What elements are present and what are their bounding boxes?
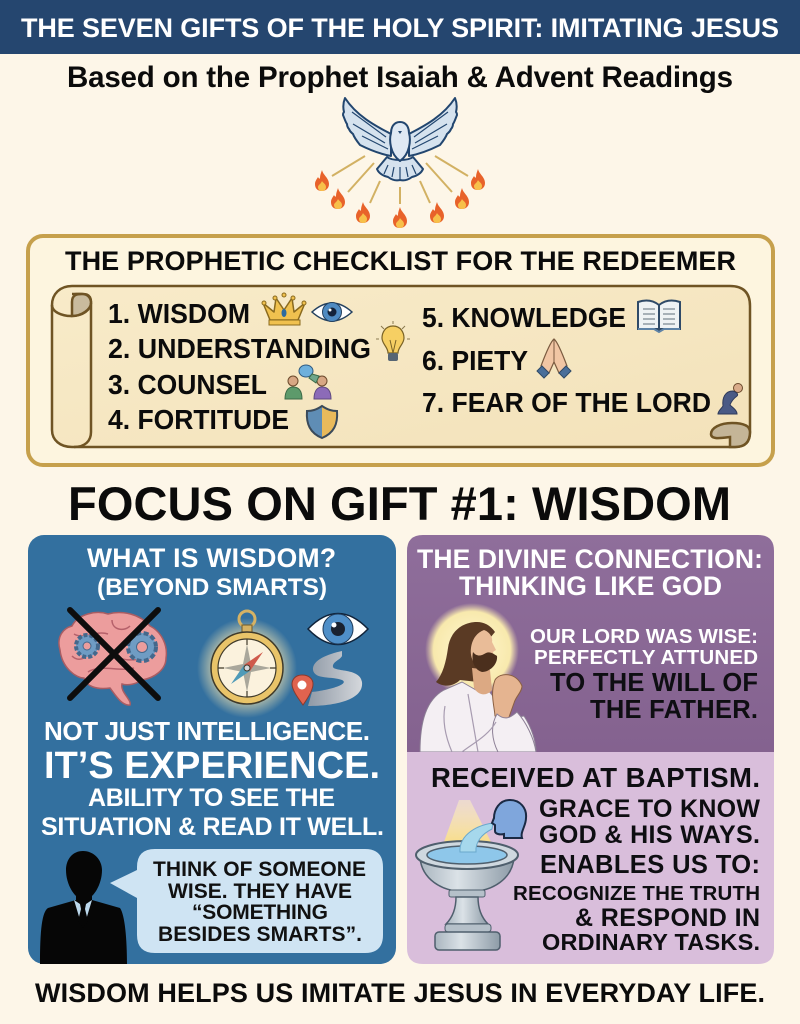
body text: IT’S EXPERIENCE. <box>44 745 380 787</box>
text: our lord was wise: TO THE WILL OF <box>550 669 758 697</box>
callout: speech bubble: THINK OF SOMEONE <box>153 858 366 881</box>
icon: light bulb <box>376 321 410 361</box>
panel heading: (BEYOND SMARTS) <box>97 574 327 601</box>
arm and praying hands <box>493 675 522 720</box>
icon: counsel people <box>285 365 331 399</box>
icon: praying hands <box>537 339 571 378</box>
text: our lord was wise: PERFECTLY ATTUNED <box>534 646 758 669</box>
callout: speech bubble: BESIDES SMARTS”. <box>158 923 362 946</box>
icon: baptismal font <box>416 841 518 950</box>
scroll shape <box>52 286 750 447</box>
face <box>471 630 496 668</box>
icon: crown <box>262 293 306 325</box>
text: our lord was wise: THE FATHER. <box>590 696 758 724</box>
callout: speech bubble: WISE. THEY HAVE <box>168 880 352 903</box>
icon: head silhouette <box>492 800 526 838</box>
beard <box>472 652 497 672</box>
icon: silhouette of a wise person <box>40 851 127 964</box>
text: received at baptism: & RESPOND IN <box>575 904 760 932</box>
body text: ABILITY TO SEE THE <box>88 784 335 812</box>
icon: compass <box>197 611 297 718</box>
panel heading: THINKING LIKE GOD <box>459 571 722 601</box>
icon: beam of light <box>444 800 491 842</box>
icon: crossed-out brain <box>59 610 166 705</box>
text: received at baptism: RECOGNIZE THE TRUTH <box>513 882 760 905</box>
body text <box>41 716 384 841</box>
panel: what is wisdom <box>28 535 396 964</box>
text: our lord was wise: OUR LORD WAS WISE: <box>530 625 758 648</box>
icon: water stream <box>460 823 493 852</box>
footer statement: WISDOM HELPS US IMITATE JESUS IN EVERYDAY LIFE. <box>35 978 765 1008</box>
panel: prophetic checklist <box>28 236 773 465</box>
header band <box>0 0 800 54</box>
icon: kneeling figure <box>718 384 742 414</box>
subtitle: Based on the Prophet Isaiah & Advent Readings <box>67 61 733 94</box>
panel heading: THE DIVINE CONNECTION: <box>417 544 763 574</box>
callout: speech bubble: “SOMETHING <box>192 901 328 924</box>
text: received at baptism <box>431 762 760 955</box>
icon: dove with flames <box>315 98 485 228</box>
icon: shield <box>307 406 337 438</box>
text: received at baptism: RECEIVED AT BAPTISM. <box>431 762 760 793</box>
panel: the divine connection <box>407 535 774 752</box>
gifts list, column two: 7. FEAR OF THE LORD <box>422 387 711 418</box>
gifts list, column one <box>108 298 371 435</box>
callout: speech bubble <box>110 849 383 953</box>
text: received at baptism: ENABLES US TO: <box>540 851 760 879</box>
panel: received at baptism <box>407 752 774 964</box>
icon: Jesus praying with halo <box>420 603 536 752</box>
section heading: focus on gift 1: FOCUS ON GIFT #1: WISDOM <box>68 477 731 530</box>
panel heading: WHAT IS WISDOM? <box>87 543 336 573</box>
body text: NOT JUST INTELLIGENCE. <box>44 716 370 746</box>
hair <box>436 622 495 686</box>
text: received at baptism: GRACE TO KNOW <box>539 795 760 823</box>
icon: winding road with pin <box>292 651 362 706</box>
header band: THE SEVEN GIFTS OF THE HOLY SPIRIT: IMITATING JESUS <box>21 13 779 43</box>
icon: open book <box>638 301 680 332</box>
text: received at baptism: GOD & HIS WAYS. <box>539 821 760 849</box>
gifts list, column one: 3. COUNSEL <box>108 369 267 400</box>
icon: eye <box>308 614 368 644</box>
panel heading <box>87 543 336 601</box>
robe <box>420 682 536 752</box>
text: received at baptism: ORDINARY TASKS. <box>542 929 760 955</box>
gifts list, column one: 2. UNDERSTANDING <box>108 333 371 364</box>
text: our lord was wise <box>530 625 758 724</box>
body text: SITUATION & READ IT WELL. <box>41 813 384 841</box>
gifts list, column one: 4. FORTITUDE <box>108 404 289 435</box>
checklist heading: THE PROPHETIC CHECKLIST FOR THE REDEEMER <box>65 246 736 276</box>
icon: eye <box>312 302 352 322</box>
gifts list, column two <box>422 302 711 418</box>
gifts list, column one: 1. WISDOM <box>108 298 250 329</box>
neck <box>472 668 492 694</box>
gifts list, column two: 6. PIETY <box>422 345 528 376</box>
gifts list, column two: 5. KNOWLEDGE <box>422 302 626 333</box>
panel heading <box>417 544 763 601</box>
